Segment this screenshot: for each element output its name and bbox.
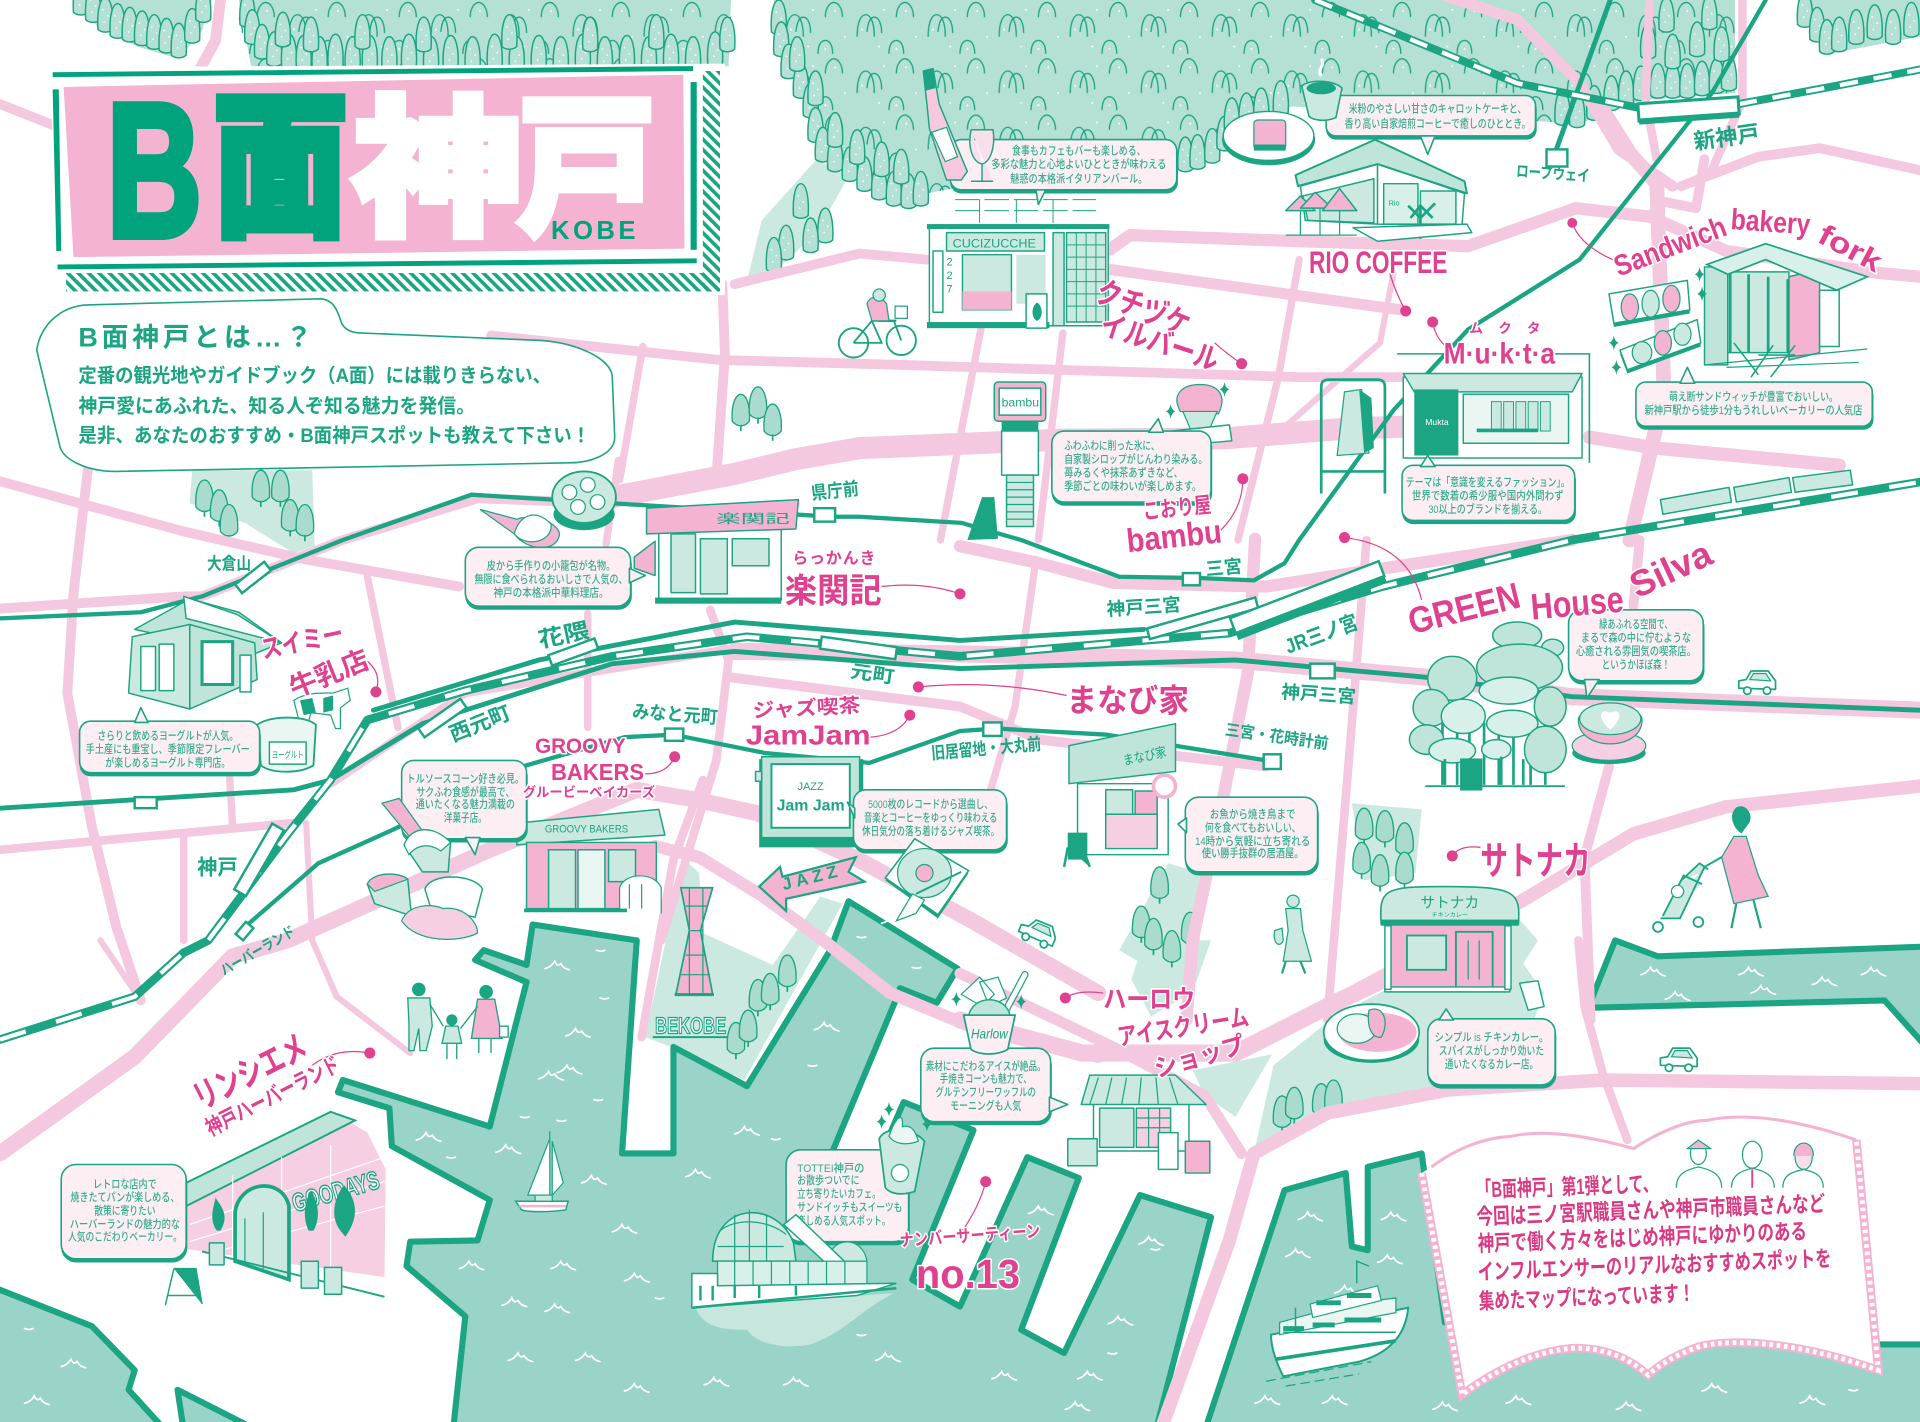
illustration: latte cup [1572, 703, 1646, 764]
callout: Satonaka: シンプル is チキンカレー。 [1434, 1031, 1548, 1044]
parks [190, 159, 1544, 1153]
callout: Manabiya [1178, 797, 1319, 876]
station names: 三宮・花時計前 [1224, 720, 1330, 753]
title: B面 [107, 64, 348, 277]
callout: Harlow: モーニングも人気 [950, 1098, 1021, 1112]
intro bubble: 是非、あなたのおすすめ・B面神戸スポットも教えて下さい！ [78, 425, 590, 447]
title: B面: B [107, 64, 202, 277]
illustration: cyclist [839, 289, 916, 358]
label: クチヅケ イルバール: クチヅケ [1091, 273, 1195, 343]
intro bubble: 定番の観光地やガイドブック（A面）には載りきらない、 [78, 364, 551, 387]
callout: Rakkanki: 無限に食べられるおいしさで人気の、 [474, 572, 628, 586]
label: ジャズ喫茶 JamJam: JamJam [746, 719, 871, 750]
callout: Swimmy: さらりと飲めるヨーグルトが人気。 [97, 729, 238, 743]
illustration: record player [885, 839, 969, 921]
callout: JamJam: 5000枚のレコードから選曲し、 [868, 797, 993, 811]
illustration: Manabiya shop [1064, 724, 1176, 867]
label: 楽関記 [785, 549, 882, 610]
callout: fork: 新神戸駅から徒歩1分もうれしいベーカリーの人気店 [1644, 403, 1862, 417]
callout: Cucizucche [950, 140, 1178, 204]
callout: Swimmy: 手土産にも重宝し、季節限定フレーバー [86, 742, 250, 756]
illustration: Harlow shop [1068, 1075, 1210, 1173]
station names: 花隈 [536, 617, 591, 653]
label: GREEN House Silva: House [1529, 579, 1625, 628]
illustration: CUCIZUCCHE shop [927, 200, 1109, 328]
callout: Groovy Bakers: トルソースコーン好き必見。 [407, 771, 524, 785]
callout: JamJam: 音楽とコーヒーをゆっくり味わえる [864, 811, 997, 825]
waves [24, 916, 1886, 1411]
label: サトナカ: サトナカ [1480, 840, 1591, 883]
label: ハーロウ アイスクリーム ショップ: ハーロウ [1103, 986, 1195, 1014]
callout: GOODAYS: 散策に寄りたい [94, 1204, 156, 1218]
illustration: GOODAYS building: GOODAYS [289, 1166, 383, 1218]
illustration: Swimmy shop [129, 596, 282, 709]
station names: 神戸三宮 [1281, 681, 1357, 707]
label: Sandwich bakery fork [1609, 203, 1888, 283]
label: 楽関記: らっかんき [792, 549, 876, 567]
label: GREEN House Silva: GREEN [1404, 575, 1524, 642]
rail lines [0, 0, 1920, 1040]
icon: three staff figures [1676, 1140, 1823, 1188]
label: Mukta [1444, 321, 1556, 371]
callout: bambu: 苺みるくや抹茶あずきなど、 [1064, 465, 1183, 479]
title: KOBE: KOBE [551, 217, 636, 245]
callout: Swimmy [80, 708, 261, 776]
label: Sandwich bakery fork: fork [1813, 218, 1888, 279]
panel: book message: 集めたマップになっています！ [1478, 1281, 1695, 1314]
label: GREEN House Silva [1404, 532, 1719, 642]
callout: TOTTEI: 楽しめる人気スポット。 [797, 1213, 890, 1227]
illustration: JAZZ arrow sign [759, 857, 864, 911]
station names: 西元町 [446, 701, 514, 747]
label: GROOVY BAKERS: GROOVY [535, 735, 626, 758]
callout: Satonaka: スパイスがしっかり効いた [1439, 1043, 1544, 1057]
callout: Satonaka: 通いたくなるカレー店。 [1445, 1058, 1538, 1071]
label: リンシエメ 神戸ハーバーランド: リンシエメ [187, 1028, 314, 1118]
illustration: CUCIZUCCHE shop: 2 [947, 270, 953, 282]
leaders and dots [312, 218, 1613, 1231]
label: ハーロウ アイスクリーム ショップ [1103, 986, 1251, 1083]
callout: GOODAYS: ハーバーランドの魅力的な [70, 1217, 180, 1231]
illustration: walking woman [1274, 895, 1311, 973]
callout: Satonaka [1428, 1009, 1556, 1089]
small trees [196, 184, 1413, 1133]
label: ハーロウ アイスクリーム ショップ: ショップ [1151, 1031, 1248, 1083]
stations [135, 97, 1739, 940]
station names: 三宮 [1205, 555, 1243, 579]
callout: Harlow: 素材にこだわるアイスが絶品。 [926, 1059, 1046, 1073]
callout: TOTTEI: サンドイッチもスイーツも [797, 1201, 902, 1214]
illustration: coffee cup and cake plate [1222, 59, 1342, 165]
callout: TOTTEI: TOTTEI神戸の [797, 1161, 864, 1175]
callout: Silva [1569, 610, 1704, 698]
label: こおり屋 bambu: bambu [1125, 513, 1224, 560]
illustration: CUCIZUCCHE shop: CUCIZUCCHE [953, 236, 1036, 250]
label: こおり屋 bambu [1125, 492, 1224, 560]
callout: fork [1636, 367, 1873, 430]
callout: GOODAYS [61, 1164, 187, 1262]
label: スイミー牛乳店: 牛乳店 [285, 645, 373, 704]
title: 神戸: 神 [351, 87, 523, 256]
intro bubble: 神戸愛にあふれた、知る人ぞ知る魅力を発信。 [78, 395, 475, 418]
illustration: xiao long bao [480, 471, 616, 548]
illustration: Satonaka shop: サトナカ [1420, 895, 1479, 911]
label: ハーロウ アイスクリーム ショップ: アイスクリーム [1116, 1003, 1251, 1052]
callout: Rio coffee: 香り高い自家焙煎コーヒーで癒しのひととき。 [1344, 116, 1531, 130]
illustration: Sandwich bakery fork shop [1609, 244, 1867, 377]
station names: 新神戸 [1692, 120, 1761, 154]
illustration: mother and stroller [1653, 807, 1768, 932]
callout: Silva: 緑あふれる空間で、 [1599, 617, 1673, 631]
callout: TOTTEI: お散歩ついでに [797, 1173, 860, 1187]
label: スイミー牛乳店 [259, 620, 373, 704]
label: Mukta: ムクタ [1469, 321, 1540, 336]
station names: 旧居留地・大丸前 [930, 734, 1042, 763]
panel: book message: 神戸で働く方々をはじめ神戸にゆかりのある [1477, 1219, 1807, 1256]
callout: Mukta: 30以上のブランドを揃える。 [1428, 502, 1547, 516]
illustration: ice cream [951, 975, 1026, 1054]
illustration: shaved ice [1166, 382, 1232, 446]
callout: Groovy Bakers: 通いたくなる魅力満載の [416, 797, 515, 811]
callout: Rio coffee [1326, 96, 1537, 154]
callout: Manabiya: 14時から気軽に立ち寄れる [1195, 834, 1310, 848]
callout: Silva: まるで森の中に佇むような [1581, 631, 1691, 645]
callout: Silva: 心癒される雰囲気の喫茶店。 [1576, 644, 1696, 658]
station names: JR三ノ宮 [1282, 611, 1361, 659]
illustration: train [1660, 470, 1853, 514]
A-board [165, 1269, 202, 1305]
station names [197, 120, 1761, 979]
illustration: sailboat [516, 1131, 568, 1212]
illustration: curry plate [1324, 1004, 1419, 1063]
label: まなび家: まなび家 [1067, 682, 1189, 718]
callout: Harlow: 手焼きコーンも魅力で、 [940, 1071, 1032, 1085]
callout: fork: 萌え断サンドウィッチが豊富でおいしい。 [1669, 389, 1838, 403]
station names: 神戸三宮 [1106, 594, 1182, 620]
label: こおり屋 bambu: こおり屋 [1142, 492, 1212, 524]
label: ナンバーサーティーン no.13: ナンバーサーティーン [899, 1221, 1041, 1251]
label: 楽関記: 楽関記 [785, 572, 882, 610]
label: GROOVY BAKERS: BAKERS [551, 759, 644, 785]
station names: 大倉山 [207, 553, 251, 573]
illustration: TOTTEI cup [877, 1102, 932, 1194]
illustration: CUCIZUCCHE shop: 2 [947, 257, 953, 269]
illustration: GOODAYS building [165, 1112, 386, 1305]
illustration: RIO COFFEE shop [1286, 140, 1472, 241]
title panel [49, 64, 725, 295]
callout: JamJam: 休日気分の落ち着けるジャズ喫茶。 [862, 824, 999, 838]
station names: 神戸 [197, 856, 238, 879]
label: ナンバーサーティーン no.13: no.13 [916, 1251, 1020, 1297]
callout: Rio coffee: 米粉のやさしい甘さのキャロットケーキと、 [1349, 102, 1526, 116]
callout: Harlow: グルテンフリーワッフルの [936, 1085, 1036, 1099]
illustration: bambu shop [967, 382, 1046, 540]
illustration: TOTTEI building [692, 1210, 896, 1346]
water: harbour [0, 901, 1920, 1422]
label: GROOVY BAKERS [523, 735, 656, 800]
illustration: GROOVY BAKERS shop [517, 809, 665, 913]
illustration: ferry [1266, 1261, 1408, 1386]
callout: Cucizucche: 魅惑の本格派イタリアンバール。 [1010, 171, 1147, 185]
label: ジャズ喫茶 JamJam: ジャズ喫茶 [752, 694, 861, 723]
callout: Groovy Bakers [402, 760, 528, 855]
callout: Rakkanki [465, 547, 645, 610]
illustration: wine bottle and glass [923, 69, 994, 181]
callout: Rakkanki: 神戸の本格派中華料理店。 [493, 585, 609, 599]
BE KOBE sign: BEKOBE [655, 1012, 726, 1038]
callout: TOTTEI [786, 1150, 910, 1245]
illustration: RIO COFFEE shop: Rio [1389, 199, 1400, 208]
illustration: cow and yogurt: ヨーグルト [272, 749, 304, 760]
illustration: Mukta shop and rack: Mukta [1425, 417, 1449, 427]
label: Sandwich bakery fork: Sandwich [1609, 210, 1731, 283]
illustration: Kobe port tower [675, 888, 714, 996]
label: ジャズ喫茶 JamJam [746, 694, 871, 750]
illustration: GROOVY BAKERS shop: GROOVY BAKERS [545, 824, 628, 836]
title: 神戸 [351, 87, 656, 256]
callout: Rakkanki: 皮から手作りの小籠包が名物。 [487, 558, 615, 572]
station names: 元町 [849, 660, 896, 687]
label: ナンバーサーティーン no.13 [899, 1221, 1041, 1297]
callout: Harlow [921, 1048, 1068, 1125]
title: B面: 面 [213, 82, 348, 257]
callout: bambu [1052, 419, 1212, 506]
illustration: Mukta shop and rack [1321, 354, 1589, 493]
callout: Mukta: 世界で数着の希少服や国内外問わず [1412, 489, 1564, 503]
callout: GOODAYS: 焼きたてパンが楽しめる、 [70, 1190, 179, 1204]
illustration: JamJam shop: JAZZ [797, 781, 824, 793]
label: スイミー牛乳店: スイミー [259, 620, 346, 665]
panel: book message: 「B面神戸」第1弾として、 [1476, 1171, 1658, 1203]
illustration: JamJam shop: Jam Jam [777, 798, 845, 815]
callout: bambu: 自家製シロップがじんわり染みる。 [1064, 452, 1207, 466]
callout: GOODAYS: 人気のこだわりベーカリー。 [68, 1229, 182, 1243]
callout: Cucizucche: 食事もカフェもバーも楽しめる、 [1012, 143, 1146, 157]
callout: bambu: 季節ごとの味わいが楽しめます。 [1064, 479, 1201, 493]
illustration: JAZZ arrow sign: JAZZ [780, 861, 839, 894]
illustration: CUCIZUCCHE shop: 7 [947, 284, 953, 296]
forest: central mountain [771, 0, 1920, 208]
station names: ロープウェイ [1516, 162, 1590, 185]
cars [1016, 671, 1776, 1071]
sandwiches [1609, 267, 1707, 375]
illustration: Manabiya shop: まなび家 [1122, 744, 1168, 768]
label: Sandwich bakery fork: bakery [1730, 203, 1812, 242]
callout: Mukta [1402, 456, 1576, 524]
station names: 県庁前 [810, 478, 860, 504]
forest: upper left [73, 0, 735, 71]
callout: Silva: というかほぼ森！ [1602, 658, 1670, 672]
callout: Swimmy: が楽しめるヨーグルト専門店。 [105, 756, 230, 770]
label: GREEN House Silva: Silva [1623, 532, 1719, 606]
illustration: JamJam shop [756, 757, 863, 847]
callout: JamJam [847, 790, 1008, 853]
illustration: Satonaka shop [1381, 887, 1544, 1010]
label: Mukta: M·u·k·t·a [1444, 338, 1556, 371]
illustration: Rakkanki shop: 楽関記 [716, 512, 790, 526]
callout: Mukta: テーマは「意識を変えるファッション」。 [1406, 475, 1570, 489]
callout: TOTTEI: 立ち寄りたいカフェ。 [797, 1187, 880, 1201]
illustration: family [408, 983, 508, 1059]
label: RIO COFFEE: RIO COFFEE [1309, 244, 1447, 280]
label: GROOVY BAKERS: グルービーベイカーズ [523, 784, 656, 800]
station names: みなと元町 [632, 701, 719, 728]
title: 神戸: 戸 [517, 87, 656, 256]
intro bubble: B面神戸とは…？ [78, 323, 312, 353]
callout: Manabiya: 使い勝手抜群の居酒屋。 [1202, 846, 1303, 860]
illustration: ice cream: Harlow [971, 1026, 1009, 1041]
callout: bambu: ふわふわに削った氷に、 [1064, 438, 1160, 452]
illustration: Rakkanki shop [634, 500, 798, 604]
station names: ハーバーランド [218, 924, 298, 979]
illustration: Satonaka shop: チキンカレー [1432, 912, 1468, 919]
panel: book message [1422, 1117, 1878, 1395]
intro bubble [37, 299, 615, 471]
callout: Manabiya: お魚から焼き鳥まで [1210, 807, 1296, 821]
illustration: pastries [367, 798, 482, 939]
label: クチヅケ イルバール: イルバール [1096, 308, 1223, 378]
illustration: GREEN House Silva tree [1409, 622, 1566, 790]
label: リンシエメ 神戸ハーバーランド: 神戸ハーバーランド [202, 1052, 344, 1141]
callout: GOODAYS: レトロな店内で [93, 1177, 157, 1191]
illustration: cow and yogurt [257, 688, 350, 772]
callout: Groovy Bakers: サクふわ食感が最高で、 [416, 785, 514, 799]
callout: Manabiya: 何を食べてもおいしい、 [1205, 820, 1300, 834]
illustration: bambu shop: bambu [1002, 396, 1039, 410]
callout: Groovy Bakers: 洋菓子店。 [444, 811, 487, 825]
callout: Cucizucche: 多彩な魅力と心地よいひとときが味わえる [991, 157, 1166, 171]
